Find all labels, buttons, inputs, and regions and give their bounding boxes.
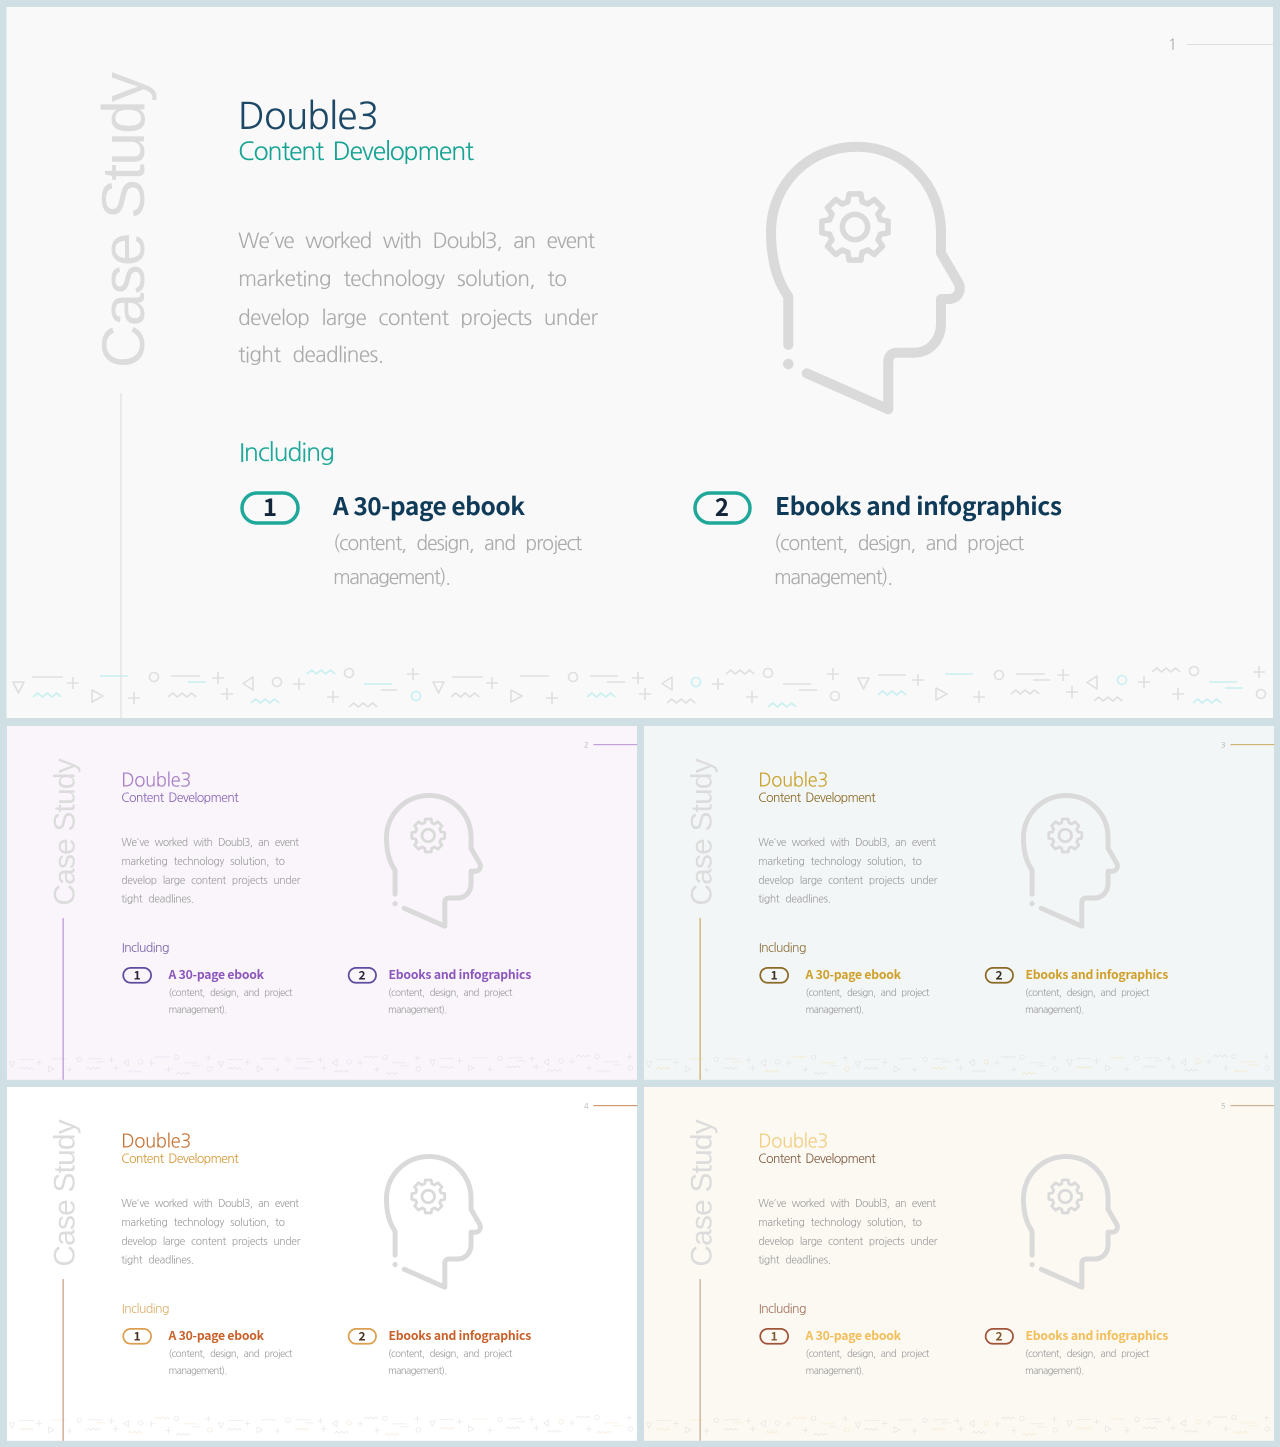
item 1 description (169, 1349, 293, 1376)
badge 1 (123, 966, 151, 983)
item 1 description: (content, design, and project (806, 1349, 930, 1359)
item 2 (986, 1326, 1168, 1376)
badge 1: 1 (134, 1327, 141, 1344)
heading: Including: Including (759, 941, 807, 954)
body paragraph (121, 837, 301, 905)
vertical rule (63, 1279, 64, 1441)
item 1 (123, 965, 293, 1015)
panel: orange slide (7, 1087, 637, 1441)
badge 2: 2 (996, 966, 1003, 983)
body paragraph: develop large content projects under (758, 875, 938, 886)
page number: 3 (1221, 742, 1226, 749)
title: Double3 (758, 1132, 828, 1151)
body paragraph: tight deadlines. (758, 1255, 831, 1266)
icon: head with gear (386, 1157, 480, 1287)
body paragraph: tight deadlines. (121, 1255, 194, 1266)
vertical heading: Case Study: Case Study (48, 1119, 81, 1267)
item 2 description (774, 533, 1024, 587)
badge 2 (349, 966, 376, 983)
slide background (7, 726, 637, 1080)
body paragraph (121, 1198, 301, 1266)
badge 1 (242, 488, 298, 523)
subtitle: Content Development (238, 139, 474, 164)
decorative pattern band (646, 1415, 1270, 1435)
subtitle: Content Development (758, 791, 876, 804)
item 2 description: (content, design, and project (388, 988, 513, 998)
vertical rule (700, 1279, 701, 1441)
icon: head with gear (771, 147, 960, 409)
body paragraph: marketing technology solution, to (758, 1217, 922, 1228)
item 1 description: (content, design, and project (806, 988, 930, 998)
item 2 description (388, 1349, 513, 1376)
body paragraph: We´ve worked with Doubl3, an event (238, 231, 595, 252)
vertical rule (700, 918, 701, 1080)
badge 1: 1 (771, 966, 778, 983)
body paragraph: develop large content projects under (121, 875, 301, 886)
badge 2 (986, 1327, 1013, 1344)
item 1 description (806, 988, 930, 1015)
title: Double3 (121, 771, 191, 790)
body paragraph: We´ve worked with Doubl3, an event (121, 837, 299, 848)
body paragraph: develop large content projects under (238, 308, 598, 330)
item 1 title: A 30-page ebook (332, 488, 525, 523)
page number (584, 1103, 637, 1110)
item 1 title: A 30-page ebook (168, 965, 265, 983)
page number (1221, 1103, 1274, 1110)
panel: purple slide (7, 726, 637, 1080)
page number (1168, 38, 1273, 53)
badge 1 (123, 1327, 151, 1344)
badge 2 (986, 966, 1013, 983)
vertical heading: Case Study: Case Study (685, 1119, 718, 1267)
body paragraph: tight deadlines. (121, 894, 194, 905)
body paragraph: marketing technology solution, to (121, 1217, 285, 1228)
vertical heading: Case Study: Case Study (90, 72, 157, 368)
item 2 title: Ebooks and infographics (388, 965, 531, 983)
body paragraph: develop large content projects under (758, 1236, 938, 1247)
slide background (644, 726, 1274, 1080)
vertical heading: Case Study: Case Study (685, 758, 718, 906)
title: Double3 (238, 98, 379, 135)
item 2 description: (content, design, and project (774, 533, 1024, 554)
subtitle: Content Development (758, 1152, 876, 1165)
heading: Including: Including (239, 440, 335, 465)
panel: gold slide (644, 726, 1274, 1080)
item 1 description: management). (806, 1366, 864, 1376)
body paragraph: marketing technology solution, to (758, 856, 922, 867)
item 2 (986, 965, 1168, 1015)
decorative pattern band (9, 1415, 633, 1435)
item 1 (760, 965, 930, 1015)
badge 1: 1 (134, 966, 141, 983)
slide background (7, 1087, 637, 1441)
heading: Including: Including (759, 1302, 807, 1315)
item 1 description (169, 988, 293, 1015)
item 2 description: management). (774, 567, 893, 587)
vertical heading: Case Study: Case Study (48, 758, 81, 906)
badge 2: 2 (715, 488, 729, 523)
body paragraph: marketing technology solution, to (238, 269, 567, 290)
item 1 description (806, 1349, 930, 1376)
item 1 description (333, 533, 582, 587)
subtitle: Content Development (121, 1152, 239, 1165)
item 1 title: A 30-page ebook (805, 965, 902, 983)
heading: Including: Including (122, 941, 170, 954)
item 1 title: A 30-page ebook (805, 1326, 902, 1344)
badge 2 (349, 1327, 376, 1344)
badge 1: 1 (263, 488, 277, 523)
body paragraph: We´ve worked with Doubl3, an event (758, 1198, 936, 1209)
item 1 description: management). (169, 1005, 227, 1015)
badge 1 (760, 1327, 788, 1344)
badge 2 (695, 488, 750, 523)
icon: head with gear (1023, 796, 1117, 926)
slide background (6, 7, 1273, 718)
item 2 description: management). (1025, 1366, 1084, 1376)
badge 2: 2 (996, 1327, 1003, 1344)
item 2 description (388, 988, 513, 1015)
decorative pattern band (9, 1054, 633, 1074)
item 1 (123, 1326, 293, 1376)
icon: head with gear (1023, 1157, 1117, 1287)
vertical rule (63, 918, 64, 1080)
item 1 description: (content, design, and project (169, 1349, 293, 1359)
decorative pattern band (646, 1054, 1270, 1074)
body paragraph: tight deadlines. (758, 894, 831, 905)
title: Double3 (758, 771, 828, 790)
page number: 5 (1221, 1103, 1226, 1110)
item 2 description: management). (388, 1366, 447, 1376)
decorative pattern band (13, 666, 1266, 707)
item 1 description: management). (169, 1366, 227, 1376)
heading: Including: Including (122, 1302, 170, 1315)
item 2 title: Ebooks and infographics (388, 1326, 531, 1344)
item 2 (349, 965, 531, 1015)
item 2 description: management). (1025, 1005, 1084, 1015)
body paragraph: develop large content projects under (121, 1236, 301, 1247)
subtitle: Content Development (121, 791, 239, 804)
item 2 (349, 1326, 531, 1376)
item 2 description: (content, design, and project (1025, 1349, 1150, 1359)
item 2 description (1025, 988, 1150, 1015)
slide background (644, 1087, 1274, 1441)
body paragraph: marketing technology solution, to (121, 856, 285, 867)
item 1 (760, 1326, 930, 1376)
page number (584, 742, 637, 749)
badge 1 (760, 966, 788, 983)
body paragraph (238, 231, 598, 366)
item 1 description: management). (806, 1005, 864, 1015)
panel: cream slide (644, 1087, 1274, 1441)
body paragraph: tight deadlines. (238, 345, 384, 366)
item 2 description: (content, design, and project (388, 1349, 513, 1359)
item 2 title: Ebooks and infographics (1025, 965, 1168, 983)
panel: main slide (6, 7, 1273, 718)
item 2 title: Ebooks and infographics (1025, 1326, 1168, 1344)
badge 2: 2 (359, 1327, 366, 1344)
item 1 description: (content, design, and project (169, 988, 293, 998)
icon: head with gear (386, 796, 480, 926)
badge 2: 2 (359, 966, 366, 983)
title: Double3 (121, 1132, 191, 1151)
page number: 2 (584, 742, 589, 749)
item 2 description (1025, 1349, 1150, 1376)
item 1 (242, 488, 582, 587)
item 2 title: Ebooks and infographics (775, 488, 1062, 523)
page number (1221, 742, 1274, 749)
vertical rule (120, 393, 122, 718)
page number: 4 (584, 1103, 589, 1110)
item 1 description: (content, design, and project (333, 533, 582, 554)
item 2 description: (content, design, and project (1025, 988, 1150, 998)
item 1 title: A 30-page ebook (168, 1326, 265, 1344)
badge 1: 1 (771, 1327, 778, 1344)
item 2 (695, 488, 1062, 587)
body paragraph (758, 837, 938, 905)
body paragraph: We´ve worked with Doubl3, an event (758, 837, 936, 848)
item 2 description: management). (388, 1005, 447, 1015)
page number: 1 (1168, 38, 1177, 53)
item 1 description: management). (333, 567, 451, 587)
body paragraph: We´ve worked with Doubl3, an event (121, 1198, 299, 1209)
body paragraph (758, 1198, 938, 1266)
